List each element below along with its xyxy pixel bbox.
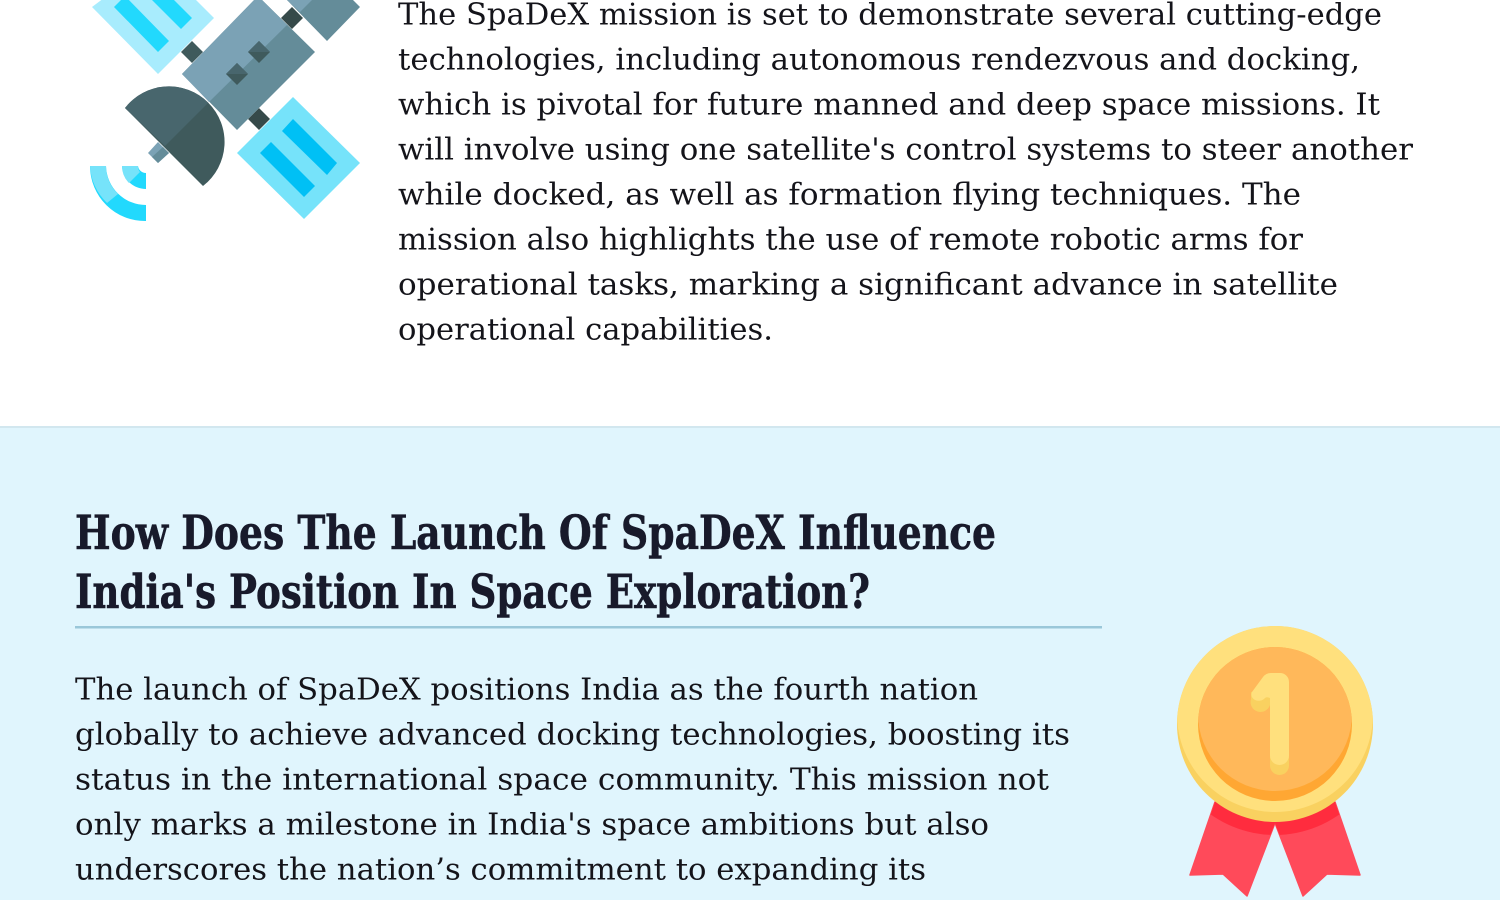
icon: first place medal — [1177, 626, 1373, 897]
heading underline — [75, 626, 1102, 628]
text block: launch influence description: globally to achieve advanced docking technologies, boosting its — [75, 718, 1070, 752]
text block: launch influence description: only marks a milestone in India's space ambitions but also — [75, 808, 989, 842]
satellite upper-left solar panel — [92, 0, 214, 74]
text block: mission description: technologies, including autonomous rendezvous and docking, — [398, 42, 1360, 76]
text block: mission description — [398, 0, 1414, 346]
satellite signal waves — [90, 166, 146, 221]
panel: India's position section — [0, 426, 1500, 900]
medal numeral one — [1251, 673, 1289, 775]
panel: upper mission section background — [0, 0, 1500, 427]
medal coin — [1177, 616, 1373, 822]
text block: launch influence description: status in the international space community. This mission not — [75, 762, 1049, 796]
satellite connectors — [181, 7, 303, 130]
satellite upper-right solar panel — [287, 0, 360, 41]
text block: mission description: will involve using one satellite's control systems to steer another — [398, 132, 1414, 166]
text block: mission description: while docked, as well as formation flying techniques. The — [398, 178, 1301, 212]
text block: mission description: which is pivotal for future manned and deep space missions. It — [398, 88, 1380, 122]
heading: influence on India's position: How Does The Launch Of SpaDeX Influence — [75, 506, 996, 561]
heading: influence on India's position — [75, 506, 996, 620]
satellite body — [182, 0, 315, 130]
text block: mission description: mission also highlights the use of remote robotic arms for — [398, 222, 1304, 256]
text block: launch influence description: underscores the nation’s commitment to expanding its — [75, 852, 926, 886]
satellite dish — [125, 86, 225, 186]
text block: launch influence description — [75, 672, 1070, 886]
text block: mission description: operational tasks, marking a significant advance in satellite — [398, 268, 1338, 302]
icon: satellite — [90, 0, 360, 221]
heading: influence on India's position: India's Position In Space Exploration? — [75, 565, 870, 620]
text block: launch influence description: The launch of SpaDeX positions India as the fourth nation — [75, 672, 978, 706]
text block: mission description: operational capabilities. — [398, 312, 773, 346]
medal ribbon — [1189, 801, 1361, 897]
satellite lower-right solar panel — [237, 97, 360, 219]
